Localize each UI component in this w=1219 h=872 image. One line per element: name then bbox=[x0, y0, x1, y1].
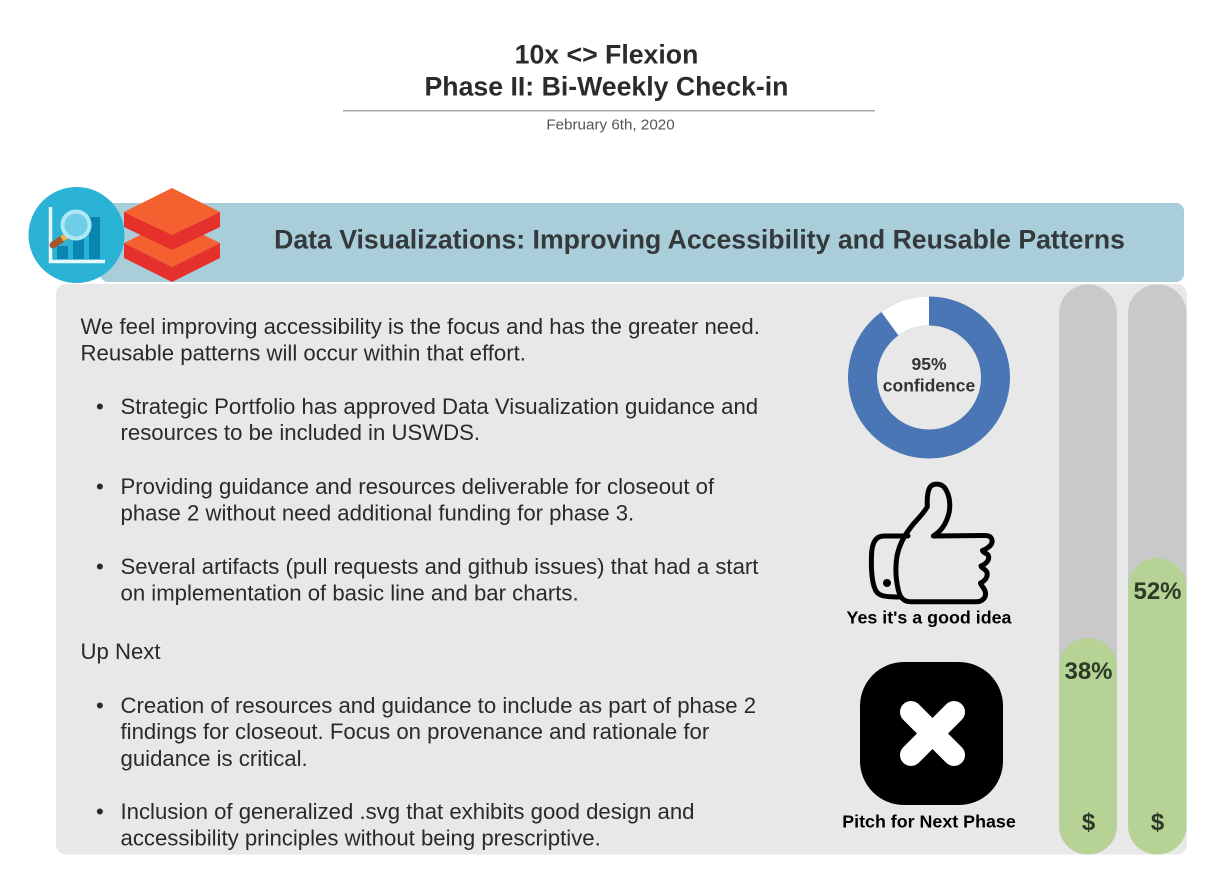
body text: • bbox=[96, 799, 104, 824]
progress bar: 38%: 38% bbox=[1064, 658, 1113, 685]
icon: thumbs up bbox=[871, 484, 992, 602]
body text: Several artifacts (pull requests and github issues) that had a start bbox=[120, 554, 758, 579]
body text: Providing guidance and resources deliverable for closeout of bbox=[120, 474, 715, 499]
label: pitch for next phase: Pitch for Next Phase bbox=[842, 812, 1016, 832]
icon: thumbs up cuff dot bbox=[883, 579, 891, 587]
header band bbox=[100, 203, 1184, 282]
label: good idea: Yes it's a good idea bbox=[847, 608, 1013, 628]
title: Phase II: Bi-Weekly Check-in bbox=[425, 72, 788, 102]
body text: We feel improving accessibility is the focus and has the greater need. bbox=[80, 314, 760, 339]
body text: resources to be included in USWDS. bbox=[120, 420, 480, 445]
body text: Reusable patterns will occur within that effort. bbox=[80, 340, 526, 366]
donut chart: 95% confidence: 95% bbox=[911, 354, 947, 374]
body text: on implementation of basic line and bar charts. bbox=[120, 580, 579, 606]
progress bar: 52%: 52% bbox=[1133, 578, 1182, 605]
body text: findings for closeout. Focus on provenance and rationale for bbox=[120, 719, 710, 744]
icon: chart with magnifier bbox=[28, 187, 124, 283]
body text: Up Next bbox=[80, 639, 161, 664]
body text: phase 2 without need additional funding for phase 3. bbox=[120, 500, 634, 526]
donut chart: 95% confidence: confidence bbox=[883, 376, 975, 396]
body text: accessibility principles without being prescriptive. bbox=[120, 826, 601, 850]
panel: content background bbox=[56, 284, 1187, 854]
header title: Data Visualizations: Improving Accessibility and Reusable Patterns bbox=[274, 224, 1125, 254]
body text: • bbox=[96, 474, 104, 499]
progress bar: 52%: $ bbox=[1151, 809, 1165, 836]
body text: Strategic Portfolio has approved Data Visualization guidance and bbox=[120, 394, 758, 419]
title bbox=[425, 40, 788, 102]
body text: Inclusion of generalized .svg that exhibits good design and bbox=[120, 799, 694, 824]
title: 10x <> Flexion bbox=[515, 40, 698, 70]
donut chart: 95% confidence bbox=[862, 296, 996, 444]
progress bar: 38%: $ bbox=[1082, 809, 1096, 836]
body text: • bbox=[96, 693, 104, 718]
body text bbox=[80, 314, 760, 850]
progress bar: 52% bbox=[1128, 284, 1186, 854]
icon: x in rounded square bbox=[860, 662, 1003, 805]
body text: • bbox=[96, 554, 104, 579]
date: February 6th, 2020 bbox=[546, 116, 675, 134]
body text: Creation of resources and guidance to include as part of phase 2 bbox=[120, 693, 756, 718]
progress bar: 38% bbox=[1059, 284, 1117, 854]
icon: stacked layers bbox=[124, 188, 220, 282]
body text: • bbox=[96, 394, 104, 419]
body text: guidance is critical. bbox=[120, 746, 308, 771]
